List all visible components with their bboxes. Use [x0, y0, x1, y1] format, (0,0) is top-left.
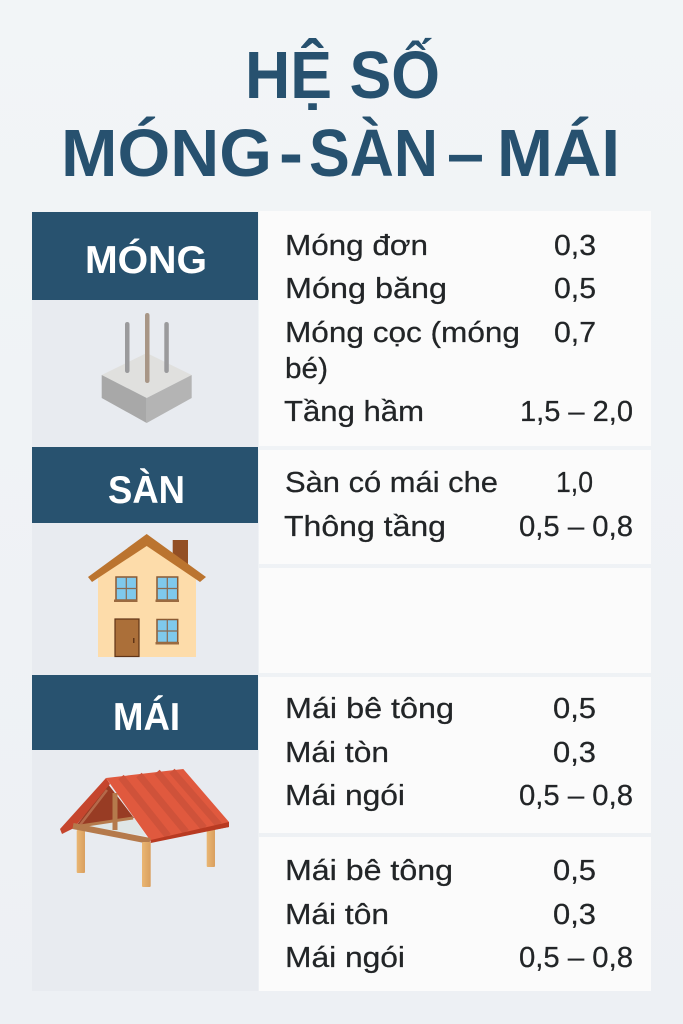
panel: empty row [259, 568, 651, 673]
row: Tầng hầm: 1,5 – 2,0 [520, 396, 633, 428]
row: Mái bê tông [285, 693, 596, 725]
row: Móng đơn [285, 230, 596, 262]
title: MÓNG [61, 116, 272, 191]
row: Mái bê tông: 0,5 [553, 855, 596, 887]
row: Móng cọc: Móng cọc (móng [285, 317, 520, 349]
row: Mái bê tông: 0,5 [553, 693, 596, 725]
row: Thông tầng [284, 511, 633, 543]
title: SÀN [309, 116, 438, 191]
row: Mái bê tông: Mái bê tông [285, 693, 454, 725]
icon: pitched roof on posts [60, 769, 229, 887]
title: MÁI [497, 116, 620, 191]
row: Sàn có mái che: Sàn có mái che [285, 467, 498, 499]
header: Móng [32, 212, 258, 300]
header: Sàn: SÀN [108, 468, 185, 512]
panel: Mái values [259, 677, 651, 833]
icon: foundation block with rebar [102, 313, 192, 423]
row: Mái ngói [285, 942, 633, 974]
row: Móng băng: 0,5 [554, 273, 596, 305]
row: Mái bê tông [285, 855, 596, 887]
row: Móng cọc: 0,7 [554, 317, 596, 349]
row: Mái ngói: Mái ngói [285, 780, 405, 812]
title: – [447, 116, 484, 191]
row: Móng cọc: bé) [285, 353, 328, 385]
row: Móng cọc [285, 317, 596, 385]
panel: Mái values repeat [259, 837, 651, 991]
row: Mái tòn: 0,3 [553, 737, 596, 769]
row: Mái tôn: Mái tôn [285, 899, 389, 931]
row: Mái ngói: 0,5 – 0,8 [519, 942, 633, 974]
title: - [279, 116, 303, 191]
row: Móng băng: Móng băng [285, 273, 447, 305]
header: Mái: MÁI [113, 695, 180, 739]
row: Móng đơn: 0,3 [554, 230, 596, 262]
row: Mái tôn: 0,3 [553, 899, 596, 931]
row: Mái bê tông: Mái bê tông [285, 855, 453, 887]
title: HỆ SỐ [245, 37, 440, 113]
row: Mái tòn: Mái tòn [285, 737, 389, 769]
icon: house [88, 534, 206, 657]
row: Mái ngói [285, 780, 633, 812]
title [61, 37, 620, 191]
row: Mái ngói: Mái ngói [285, 942, 405, 974]
row: Tầng hầm [284, 396, 633, 428]
row: Mái tôn [285, 899, 596, 931]
row: Móng băng [285, 273, 596, 305]
header: Móng: MÓNG [85, 238, 207, 282]
row: Thông tầng: 0,5 – 0,8 [519, 511, 633, 543]
panel: Sàn values [259, 450, 651, 564]
row: Sàn có mái che: 1,0 [556, 467, 593, 499]
panel: left column background [32, 212, 258, 991]
row: Mái tòn [285, 737, 596, 769]
row: Mái ngói: 0,5 – 0,8 [519, 780, 633, 812]
header: Mái [32, 675, 258, 750]
row: Sàn có mái che [285, 467, 593, 499]
panel: Móng values [259, 211, 651, 446]
header: Sàn [32, 447, 258, 523]
row: Thông tầng: Thông tầng [284, 511, 446, 543]
row: Tầng hầm: Tầng hầm [284, 396, 424, 428]
row: Móng đơn: Móng đơn [285, 230, 428, 262]
